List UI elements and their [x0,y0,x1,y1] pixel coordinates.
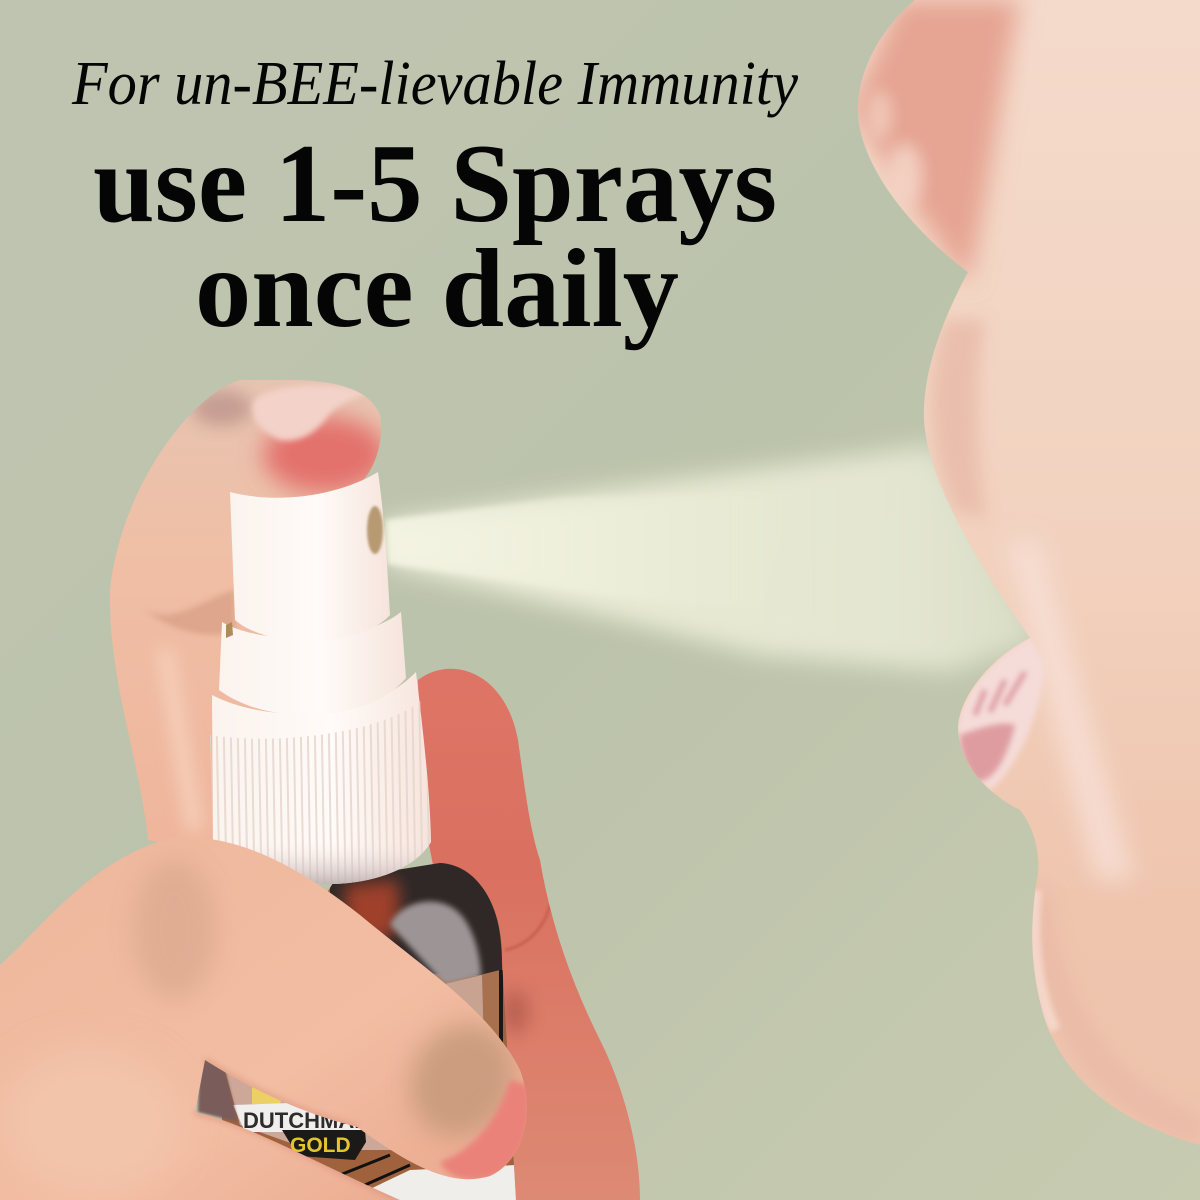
gap shadow [198,1056,238,1122]
face profile [850,0,1200,1200]
logo name: DUTCHMAN [243,1108,370,1133]
middle collar [219,612,406,715]
joint tan [402,1016,522,1143]
lower lip [958,638,1045,790]
diagonal stripes [340,1155,410,1185]
fingertip flush [263,417,387,493]
bottle [198,855,520,1200]
grey highlight [390,901,481,985]
ribbed collar [212,672,431,884]
spray nozzle and cap [210,472,431,884]
red reflection [345,880,400,945]
dark shoulder [330,863,502,975]
gold plate [282,1130,366,1160]
nail [440,1080,530,1180]
label strip [446,970,499,1037]
palm shading [18,1064,160,1172]
dosage line two: once daily [195,227,679,351]
chin shading [1044,911,1187,1128]
nozzle hole [367,506,383,554]
nail [253,385,367,440]
hand: back finger [110,380,382,842]
knuckle shading [133,860,217,1000]
actuator [230,472,390,641]
spray mist [386,445,1040,672]
tagline: For un-BEE-lievable Immunity [71,50,798,118]
label panel [226,1072,391,1150]
upper lip shading [931,320,985,520]
logo banner [233,1103,361,1132]
white base [368,1165,516,1200]
crease [145,590,235,635]
logo hexagon [252,1088,281,1104]
hand: right finger [418,668,640,1200]
headline [71,50,798,351]
pale cheek band [1005,540,1135,880]
thumb and palm [0,820,540,1200]
finger highlight [165,650,195,830]
dosage line one: use 1-5 Sprays [93,122,777,246]
nose shading [850,0,1020,285]
gold word: GOLD [290,1134,351,1157]
knuckle shadow [192,390,252,426]
